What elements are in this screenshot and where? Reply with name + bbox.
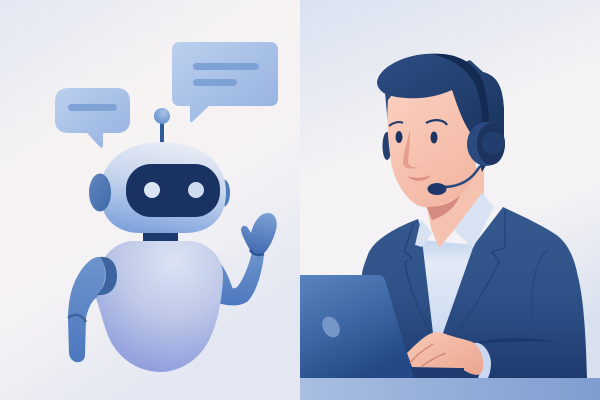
agent neck — [426, 168, 484, 248]
robot neck — [143, 233, 178, 241]
desk — [300, 378, 600, 400]
mic boom — [443, 166, 480, 187]
robot — [68, 108, 277, 372]
right panel background — [300, 0, 600, 400]
robot visor — [126, 164, 220, 217]
robot left ear — [89, 174, 111, 212]
robot right arm — [218, 252, 264, 305]
agent far ear — [382, 132, 392, 160]
agent sleeve fold — [478, 338, 556, 344]
earcup — [467, 122, 505, 166]
agent jacket — [362, 207, 587, 378]
left panel background — [0, 0, 300, 400]
agent hand — [407, 332, 483, 375]
robot eyes — [144, 182, 204, 198]
mic — [428, 183, 446, 195]
agent face — [387, 85, 477, 207]
support agent — [362, 54, 587, 378]
robot antenna — [154, 108, 170, 144]
agent neck shadow — [426, 195, 460, 220]
agent hair back — [385, 60, 504, 172]
speech bubble: small — [55, 88, 130, 148]
laptop base — [412, 368, 464, 378]
agent shirt — [422, 240, 474, 333]
laptop — [300, 275, 414, 378]
speech bubble: large — [172, 42, 278, 122]
mouth — [407, 175, 431, 181]
robot body — [95, 241, 223, 372]
headband — [432, 54, 489, 125]
nose — [403, 130, 418, 169]
robot raised hand — [241, 213, 277, 255]
agent collar — [415, 193, 494, 248]
brows — [389, 122, 403, 126]
agent hair — [377, 54, 504, 132]
robot right ear — [218, 180, 230, 206]
agent headset — [428, 54, 505, 195]
eyes — [396, 131, 402, 143]
agent face details — [389, 120, 447, 181]
agent cuff — [474, 343, 491, 378]
robot left arm — [68, 257, 117, 362]
robot head — [100, 142, 226, 233]
